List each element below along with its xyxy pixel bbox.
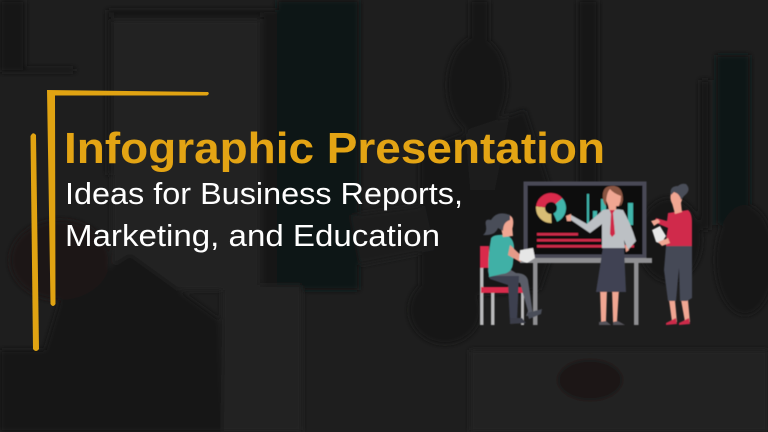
table [520,258,652,325]
subtitle: Marketing, and Education [65,218,440,253]
title: Infographic Presentation [64,124,605,173]
donut chart [540,198,562,218]
decorative frame: top and inner vertical yellow strokes [47,90,209,306]
text lines [537,233,634,248]
subtitle: Ideas for Business Reports, [65,176,463,211]
illustration: presentation team [480,184,692,325]
whiteboard [526,184,644,256]
bar chart [587,194,633,225]
subtitle [65,176,463,253]
decorative frame: outer vertical yellow stroke [30,133,39,351]
standing presenter [566,186,636,325]
standing colleague with tablet [651,184,692,325]
seated woman with chair [480,213,542,325]
